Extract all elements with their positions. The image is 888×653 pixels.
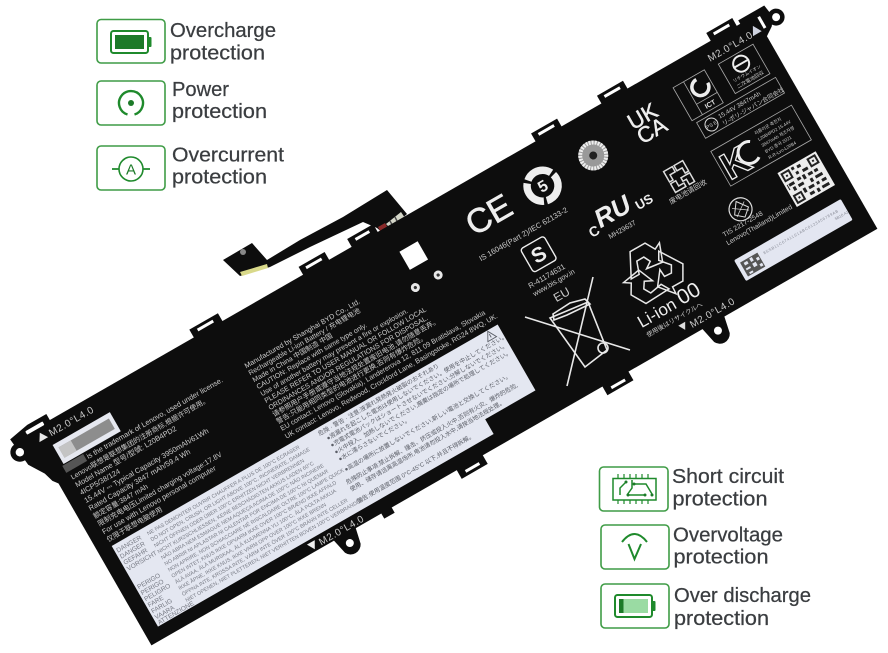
text block: Japanese warnings: 警告:使用温度范围 0°C-45°C 以下,并且不得拆解。 [355,432,476,505]
mark: BIS [510,231,576,299]
label: protection [674,607,769,630]
bottom edge tabs [333,315,736,560]
mark: UKCA: CA [632,112,672,149]
box: KC mark: BYD 중국 2021 [764,135,793,155]
mark: M2.0 L4.0 left [35,404,96,446]
text block: manufacturer and caution: Made in China 中国制造 中国 [251,331,334,384]
label: Overcharge [170,19,276,42]
Lenovo logo label [53,412,121,464]
serial label: 5B10 A1 [834,209,850,221]
box: PSE rating [697,77,785,138]
text block: model information: 4ICP5/38/124 [78,467,122,497]
text block: Japanese warnings: ●充電式電池パックはショートさせないでください,分解しないでください。 [329,341,509,449]
feature: over discharge protection [601,584,811,630]
window cutout and screws [392,239,444,294]
label [172,78,267,123]
mark: UKCA: UK [623,98,662,135]
box: PSE rating: 15.44V 3847mAh [717,90,763,120]
icon: voltmeter arc [622,534,647,559]
label [673,524,783,568]
text block: multilingual warnings: NIET OPENEN, NIET PLETTEREN, NIET VERHITTEN BOVEN 100°C VERBRANDEN [185,497,365,604]
text block: manufacturer and caution: 警告:只能用相同类型的电池进行更换,否则有爆炸危险。 [275,332,428,426]
text block: multilingual warnings: IKKE ÅPNE, IKKE KNUS, IKKE VARM OPP OVER 100°C IKKE BRENN [177,501,328,592]
text block: model information: 限制充电电压Limited charging voltage:17.8V [96,450,224,528]
text block: model information: Rated Capacity 3847 mAh/59.4 Wh [87,447,192,513]
top edge tabs [189,18,738,339]
icon: round seal [573,135,614,176]
icon: recycling period 5 [521,165,564,207]
label [674,584,811,630]
label [672,465,784,510]
feature: power protection [97,78,267,125]
mark: China recycling: 废电池请回收 [667,177,708,206]
QR code [777,151,835,207]
icon: recycling period 5: 5 [535,177,551,197]
mark: EU: EU [551,284,572,305]
mark: BIS: www.bis.gov.in [530,267,576,299]
text block: multilingual warnings: PERIGO [140,578,165,597]
mark: Thai standard: TIS 2217-2548 [722,210,764,239]
mark: CE: CE [459,187,519,243]
mark: UKCA [623,97,672,149]
box: PSE rating: リ-ポリ-ジャパン合同会社 [721,86,785,127]
text block: Japanese warnings: ●液漏れを起こした電池は使用しないでください。使用を中止してください。 [325,332,508,442]
box: KC mark: K [714,138,759,189]
text block: model information: Lenovo联想是联想集团的注册商标,根据许可使用。 [69,395,210,481]
feature: overcharge protection [97,19,276,64]
warning triangle [483,329,497,342]
text block: Japanese warnings: 危険防止事項:禁止拆解、撞击、挤压或投入火中,否则有火灾、爆炸的危险, [344,381,520,486]
mark: BIS: R-41174631 [527,262,567,290]
text block: multilingual warnings: DANGER [119,541,147,561]
text block: model information: 仅限于联想电脑使用 [105,505,164,544]
feature: overcurrent protection [97,144,284,190]
text block: multilingual warnings: FARE [147,594,166,609]
mark: China recycling [655,156,708,206]
box: KC mark: L20B4PD2 15.44V [757,119,792,142]
text block: model information [62,375,265,545]
label: protection [674,546,768,568]
mark: Thai standard [710,176,794,247]
text block: multilingual warnings: ÄLÄ AVAA, ÄLÄ MURSKAA, ÄLÄ KUUMENNA YLI 100°C, ÄLÄ POLTA AKKUA [174,487,338,586]
label: Overvoltage [673,524,783,546]
mark: M2.0 L4.0 left: M2.0°L4.0 [47,405,96,439]
serial label: 8SSB11C67411S1ABC0123456789AB [762,208,839,255]
text block: multilingual warnings: NICHT ÖFFNEN ODER ÜBER 100°C ERHITZEN NICHT VERBRENNEN [153,457,306,549]
text block: manufacturer and caution: Use of another battery may present a fire or explosion. [260,308,410,398]
box: KC mark [711,105,813,190]
white warning panel [112,324,544,627]
text block: manufacturer and caution: UK contact: Lenovo, Redwood, Crockford Lane, Basingstoke, RG24 8WQ, UK. [284,313,499,440]
text block: Japanese warnings: ●高温の場所に放置しないでください,新しい電池と交換してください。 [343,371,512,473]
box: circle mark: リチウムイオン [731,63,762,84]
text block: multilingual warnings: FARLIG [150,598,174,615]
label: protection [172,166,267,188]
text block: manufacturer and caution: Rechargeable Li-ion Battery / 充电锂电池 [247,306,362,377]
icon: full battery [111,31,152,53]
text block: multilingual warnings: NÃO ABRA NEM ESMAGUE NEM AQUEÇA ACIMA DE 100°C NÃO INCINERE [160,462,326,561]
Li-ion label: 使用後はリサイクルへ [645,299,705,339]
text block: model information: is the trademark of Lenovo, used under license. [85,375,224,461]
mark: UL recognized: RU [589,188,637,234]
label: protection [672,488,768,510]
text block: Japanese warnings: 使用、储存请远离高温场所,电池请勿投入水中,请按当地法规处理。 [348,398,506,493]
feature: short circuit protection [600,465,784,511]
mark: M2.0 L4.0 bottom: M2.0°L4.0 [317,514,366,548]
text block: multilingual warnings: VORSICHT [126,550,159,573]
label: Overcurrent [172,144,284,166]
feature: overvoltage protection [601,524,783,569]
text block: model information: 额定容量:3847 mAh [91,482,150,520]
text block: multilingual warnings [115,429,368,626]
serial label [734,199,853,281]
mounting tab: left hole [2,414,81,499]
text block: multilingual warnings: PELIGRO [143,583,172,603]
icon: crossed-out bin [525,277,630,386]
text block: multilingual warnings: NICHT KURZSCHLIESSEN, KEINE BESCHÄDIGTEN AKKUS LADEN 60°C [156,460,315,555]
text block: multilingual warnings: DO NOT OPEN, CRUSH, OR LIGHT ABOVE 100°C, INCINERATE, DAMAGE [150,447,312,543]
text block: multilingual warnings: NE PAS DEMONTER OUVRIR CHAUFFER A PLUS DE 100°C ECRASER [146,445,301,537]
box: KC mark: 3847mAh 제조자명 [760,124,796,149]
text block: model information: For use with Lenovo personal computer [100,463,218,536]
mark: UL recognized: US [633,191,656,213]
icon: circuit chip [613,474,656,504]
text block: model information: 15.44V ⎓ Typical Capacity 3950mAh/61Wh [82,426,210,505]
mark: BIS: S [527,242,551,269]
text block: multilingual warnings: NON APRIRE, NON SCHIACCIARE NÉ RISCALDARE OLTRE 100°C LAMPE QUICK [167,467,346,574]
text block: manufacturer and caution: 请参照用户手册或遵守当地法规处置废旧电池,请勿随意丢弃。 [271,316,441,419]
icon: ammeter: A [126,162,136,178]
text block: multilingual warnings: DANGER [115,534,143,555]
text block: manufacturer and caution: ORDINANCES AND/OR REGULATIONS FOR DISPOSAL. [268,315,430,412]
text block: multilingual warnings: GEFAHR [122,547,149,567]
text block: multilingual warnings: PERIGO [136,572,162,591]
label: protection [172,100,267,123]
box: ICT mark [673,70,723,121]
box: KC mark: R-R-Lvo-L20B4 [767,140,798,160]
text block: manufacturer and caution: PLEASE REFER TO USER MANUAL OR FOLLOW LOCAL [264,306,428,405]
icon: ammeter [112,157,150,181]
text block: manufacturer and caution: CAUTION: Replace with same type only. [256,322,368,391]
text block: Japanese warnings [317,325,543,505]
label: Power [172,78,229,101]
label [172,144,284,188]
text block: multilingual warnings: NO ABRIR NI APLASTAR NI CALENTAR POR ENCIMA DE 100°C NI QUEMAR [164,469,330,567]
mark: UL recognized: MH29637 [608,220,638,241]
label: Over discharge [674,584,811,607]
text block: multilingual warnings: VAARA [154,604,176,621]
box: PSE rating: PS E [706,120,719,131]
text block: multilingual warnings: OPEN INTET, KNUS IKKE OPVARM IKKE OVER 100°C BRÆND IKKE AFFALD [171,480,338,580]
icon: low battery [615,595,656,617]
mark: M2.0 L4.0 lower right: M2.0°L4.0 [688,296,737,331]
text block: multilingual warnings: ÖPPNA INTE, KROSSA INTE, VÄRM INTE ÖVER 100°C BRÄNN INTE CELLER [181,497,349,598]
label: protection [170,42,265,64]
box: ICT mark: ICT [704,99,718,111]
text block: multilingual warnings: ATTENZIONE [157,600,196,626]
mark: Thai standard: Lenovo(Thailand)Limited [725,204,794,247]
Li-ion label: Li-ion 00 [633,278,705,333]
standard reference: IS 16046(Part 2)/IEC 62133-2 [478,205,569,263]
label [170,19,276,64]
text block: manufacturer and caution [243,241,499,440]
text block: Japanese warnings: ●水に濡らさないでください。 [337,415,411,463]
box: circle mark: 二次電池回収 [736,69,765,90]
icon: power [119,91,143,114]
box: circle mark [718,44,770,94]
mark: UL recognized: C [586,222,602,241]
text block: model information: Model Name 型号/型號: L20B4PD2 [73,424,178,489]
text block: manufacturer and caution: Manufactured by Shanghai BYD Co., Ltd. [243,297,362,370]
text block: manufacturer and caution: EU contact: Lenovo (Slovakia), Landererova 12, 811 09 Bratislava, Slovakia [280,310,487,433]
mark: UL recognized [578,178,661,248]
box: KC mark: 리튬이온 축전지 [753,116,783,137]
text block: Japanese warnings: 危険 · 警告 · 注意:液漏れ発熱発火破裂のおそれあり [317,362,440,438]
label: Short circuit [672,465,784,488]
mark: M2.0 L4.0 top right: M2.0°L4.0 [706,30,755,64]
icon: recycling arrows [607,229,702,320]
ribbon cable and connector [223,190,407,276]
mounting tab: top right hole [738,0,789,45]
text block: Japanese warnings: ●火中投入、加熱しないでください,廃棄は指定の場所で処理してください。 [333,348,513,456]
